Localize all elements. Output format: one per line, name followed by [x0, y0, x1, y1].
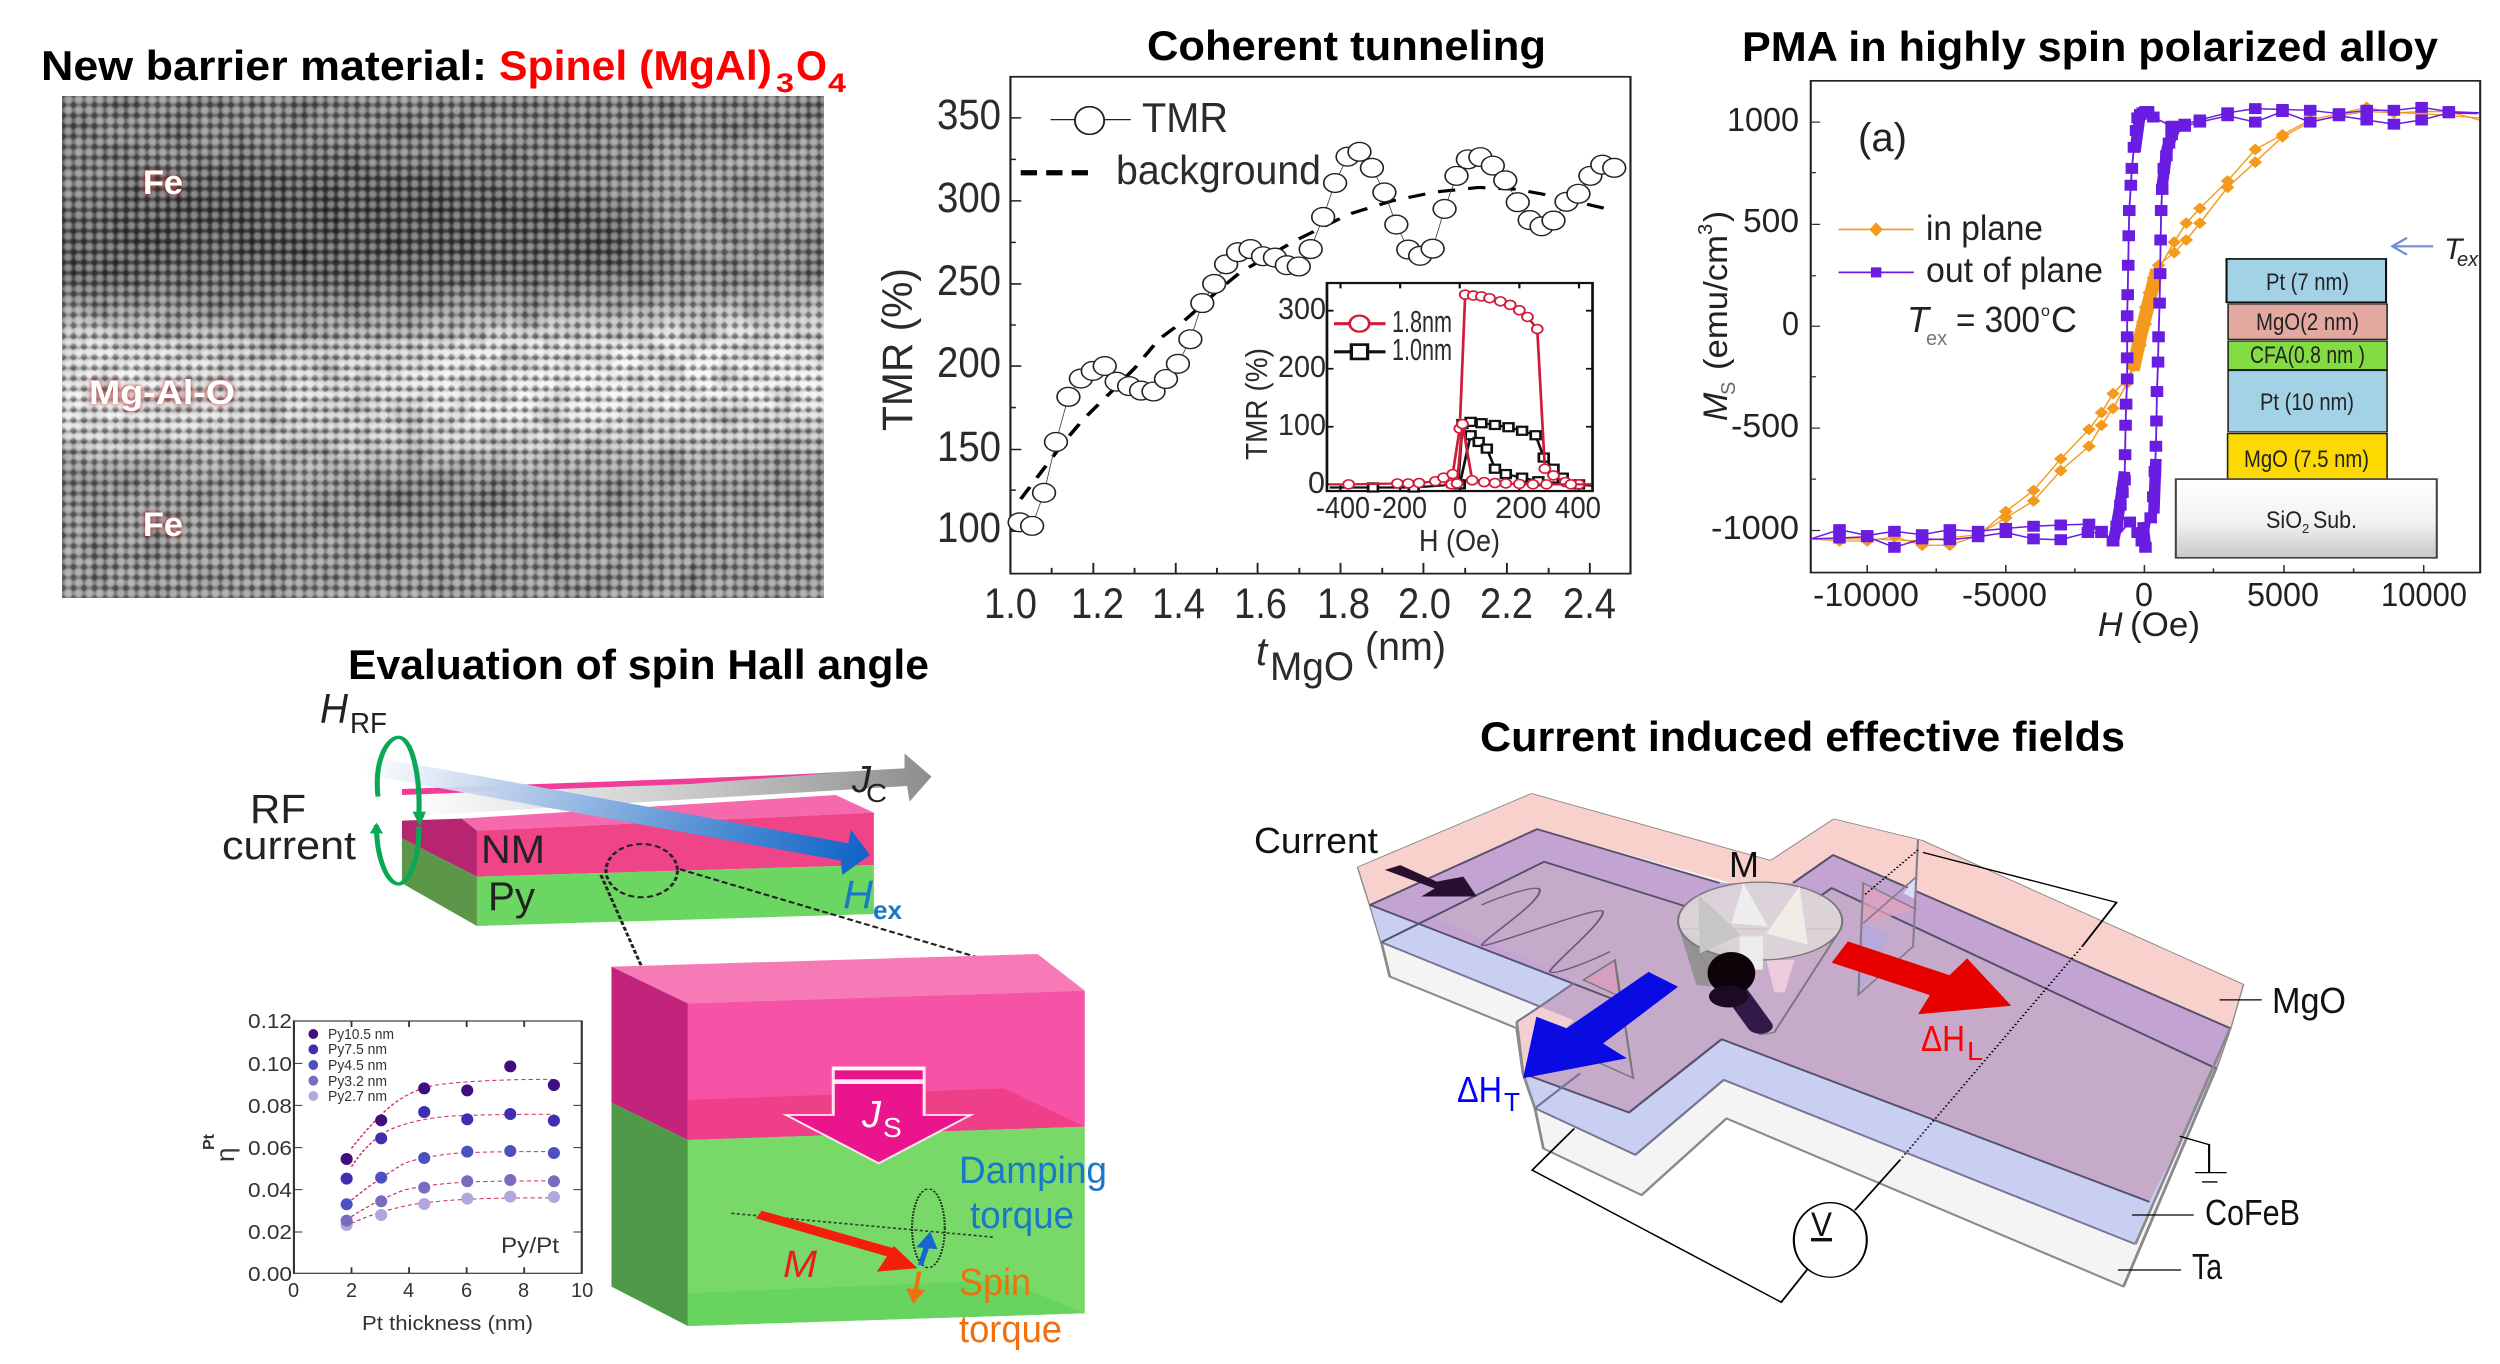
- label: Fe top: Fe: [143, 164, 183, 202]
- chart: TMR vs MgO thickness: 1.2: [1071, 580, 1124, 628]
- diagram: layered device with effective fields: V: [1811, 1206, 1832, 1244]
- diagram: spin Hall slab with RF current: current: [222, 824, 356, 868]
- chart: spin Hall angle vs Pt thickness: Pt: [201, 1133, 218, 1150]
- label: Mg-Al-O: Mg-Al-O: [89, 374, 235, 412]
- diagram: spin Hall slab with RF current: NM: [481, 828, 545, 872]
- diagram: enlarged NM/Py block with spin torques: torque: [959, 1309, 1062, 1351]
- chart: magnetization hysteresis: 10000: [2381, 576, 2467, 613]
- chart: TMR vs MgO thickness: 200: [937, 339, 1001, 387]
- 1.8nm curves: [1330, 295, 1591, 484]
- title: new barrier material: Spinel (MgAl): [499, 42, 772, 89]
- zoom circle: [606, 844, 677, 897]
- chart: TMR vs MgO thickness: TMR: [1142, 94, 1228, 141]
- title: new barrier material: O: [796, 42, 827, 89]
- MgO top layer: [1358, 794, 2243, 1028]
- chart: magnetization hysteresis: o: [2041, 303, 2050, 320]
- diagram: enlarged NM/Py block with spin torques: J: [861, 1094, 882, 1136]
- diagram: layered device with effective fields: Ta: [2192, 1246, 2223, 1287]
- chart: magnetization hysteresis: 1000: [1727, 101, 1799, 138]
- chart inset: TMR vs H: 300: [1278, 291, 1326, 326]
- film stack diagram: Pt (7 nm): [2266, 269, 2349, 296]
- TMR data series: [1020, 152, 1614, 526]
- translucent field planes: [1863, 883, 1917, 923]
- chart: spin Hall angle vs Pt thickness: 0.10: [248, 1054, 292, 1076]
- circuit wiring: [1532, 850, 2262, 1302]
- chart: spin Hall angle vs Pt thickness: 0.12: [248, 1011, 292, 1033]
- chart: magnetization hysteresis: H: [2098, 606, 2123, 644]
- chart: magnetization hysteresis: [1695, 81, 2480, 644]
- chart: spin Hall angle vs Pt thickness: 2: [346, 1280, 357, 1302]
- diagram: layered device with effective fields: ΔH: [1921, 1018, 1965, 1059]
- diagram: spin Hall slab with RF current: H: [843, 873, 873, 917]
- film stack diagram: MgO (7.5 nm): [2244, 446, 2369, 473]
- diagram: enlarged NM/Py block with spin torques: M: [783, 1244, 817, 1286]
- title: new barrier material: 4: [828, 68, 846, 98]
- chart inset: TMR vs H: 1.8nm: [1392, 304, 1452, 339]
- chart: magnetization hysteresis: 0: [1782, 305, 1799, 342]
- diagram: layered device with effective fields: Current: [1254, 820, 1378, 861]
- chart: magnetization hysteresis: in plane: [1926, 209, 2043, 248]
- chart: magnetization hysteresis: = 300: [1956, 299, 2040, 340]
- chart: magnetization hysteresis: C: [2051, 299, 2077, 340]
- chart: spin Hall angle vs Pt thickness: 0.06: [248, 1138, 292, 1160]
- inner lighter surface: [1434, 862, 2216, 1202]
- chart: TMR vs MgO thickness: t: [1256, 630, 1269, 674]
- chart: TMR vs MgO thickness: 350: [937, 91, 1001, 139]
- Jc arrow: [404, 753, 932, 817]
- film stack diagram: CFA(0.8 nm ): [2250, 342, 2365, 369]
- chart: spin Hall angle vs Pt thickness: 8: [518, 1280, 529, 1302]
- torque arrows: [921, 1243, 928, 1265]
- chart: TMR vs MgO thickness: 300: [937, 174, 1001, 222]
- chart: TMR vs MgO thickness: 2.2: [1480, 580, 1533, 628]
- HRF loop: [376, 737, 419, 884]
- chart inset: TMR vs H: 1.0nm: [1392, 332, 1452, 367]
- film stack diagram: [2176, 233, 2479, 558]
- chart: magnetization hysteresis: (emu/cm: [1697, 235, 1734, 370]
- chart: TMR vs MgO thickness: 1.0: [984, 580, 1037, 628]
- Hex arrow: [359, 754, 870, 875]
- slab faces: [462, 795, 874, 831]
- voltmeter: [1794, 1203, 1867, 1277]
- chart: spin Hall angle vs Pt thickness: η: [210, 1148, 240, 1162]
- fit curves: [351, 1079, 554, 1223]
- chart: spin Hall angle vs Pt thickness: Py10.5 nm: [328, 1026, 394, 1043]
- film stack diagram: ex: [2457, 249, 2479, 271]
- chart: TMR vs MgO thickness: 2.0: [1398, 580, 1451, 628]
- inset legend markers: [1334, 320, 1385, 327]
- chart: magnetization hysteresis: 5000: [2247, 576, 2319, 613]
- diagram: enlarged NM/Py block with spin torques: S: [883, 1112, 902, 1143]
- arm tip: [1517, 1007, 1574, 1074]
- longitudinal red arrow: [1832, 941, 2011, 1014]
- chart inset: TMR vs H: -200: [1373, 490, 1427, 525]
- diagram: layered device with effective fields: MgO: [2272, 980, 2346, 1021]
- chart: TMR vs MgO thickness: 1.6: [1234, 580, 1287, 628]
- diagram: spin Hall slab with RF current: Py: [488, 875, 535, 919]
- chart: TMR vs MgO thickness: MgO: [1270, 645, 1354, 689]
- diagram: enlarged NM/Py block with spin torques: [611, 954, 1107, 1351]
- title: PMA in highly spin polarized alloy: PMA in highly spin polarized alloy: [1742, 23, 2439, 70]
- diagram: spin Hall slab with RF current: ex: [873, 895, 903, 925]
- dashed background curve: [1021, 187, 1614, 499]
- chart: magnetization hysteresis: S: [1718, 382, 1740, 395]
- chart: magnetization hysteresis: -500: [1731, 407, 1799, 444]
- diagram: spin Hall slab with RF current: [222, 685, 981, 975]
- title: coherent tunneling: Coherent tunneling: [1147, 22, 1546, 69]
- Ta layer: [1358, 794, 2243, 1287]
- title: new barrier material: New barrier material:: [41, 42, 487, 89]
- film stack diagram: Pt (10 nm): [2260, 389, 2354, 416]
- in plane series: [1811, 107, 2479, 545]
- chart: TMR vs MgO thickness: 2.4: [1563, 580, 1616, 628]
- chart: TMR vs MgO thickness: background: [1116, 147, 1321, 193]
- chart: spin Hall angle vs Pt thickness: 0.00: [248, 1264, 292, 1286]
- diagram: spin Hall slab with RF current: C: [866, 778, 887, 808]
- film stack diagram: SiO: [2266, 507, 2302, 534]
- chart: magnetization hysteresis: -1000: [1711, 509, 1799, 546]
- panel: HRTEM lattice micrograph: [20, 96, 870, 640]
- chart: TMR vs MgO thickness: 1.8: [1317, 580, 1370, 628]
- diagram: spin Hall slab with RF current: H: [320, 685, 349, 732]
- diagram: enlarged NM/Py block with spin torques: Spin: [959, 1262, 1031, 1304]
- precession cone lines: [731, 1213, 995, 1237]
- chart: spin Hall angle vs Pt thickness: Pt thickness (nm): [362, 1313, 533, 1335]
- chart: magnetization hysteresis: ): [1697, 211, 1734, 222]
- chart: spin Hall angle vs Pt thickness: 6: [461, 1280, 472, 1302]
- current arrow: [1385, 865, 1477, 897]
- signal wave: [1482, 888, 1610, 972]
- chart: TMR vs MgO thickness: 1.4: [1152, 580, 1205, 628]
- chart: TMR vs MgO thickness: (nm): [1365, 625, 1446, 669]
- purple overlap surface: [1370, 829, 2230, 1202]
- out of plane series: [1811, 107, 2480, 541]
- Js arrow: [786, 1067, 971, 1163]
- diagram: layered device with effective fields: T: [1504, 1087, 1520, 1117]
- chart inset: TMR vs H: 200: [1278, 349, 1326, 384]
- film stack diagram: 2: [2302, 521, 2309, 536]
- chart: magnetization hysteresis: (a): [1858, 116, 1907, 160]
- chart inset: TMR vs H: [1239, 283, 1601, 558]
- chart: spin Hall angle vs Pt thickness: [201, 1011, 593, 1335]
- chart: spin Hall angle vs Pt thickness: 4: [403, 1280, 414, 1302]
- diagram: enlarged NM/Py block with spin torques: Damping: [959, 1150, 1107, 1192]
- film stack diagram: MgO(2 nm): [2256, 309, 2359, 336]
- diagram: spin Hall slab with RF current: RF: [250, 786, 306, 832]
- chart inset: TMR vs H: 100: [1278, 407, 1326, 442]
- chart inset: TMR vs H: TMR (%): [1239, 348, 1274, 460]
- chart: TMR vs MgO thickness: 100: [937, 504, 1001, 552]
- diagram: enlarged NM/Py block with spin torques: torque: [970, 1195, 1074, 1237]
- label: Fe bottom: Fe: [143, 506, 183, 544]
- chart: spin Hall angle vs Pt thickness: Py/Pt: [501, 1233, 559, 1258]
- chart: spin Hall angle vs Pt thickness: 10: [571, 1280, 593, 1302]
- magnetization arrow: [1736, 992, 1760, 1026]
- diagram: layered device with effective fields: L: [1967, 1036, 1983, 1066]
- chart: magnetization hysteresis: -5000: [1962, 576, 2047, 613]
- chart: spin Hall angle vs Pt thickness: Py3.2 nm: [328, 1073, 387, 1090]
- chart inset: TMR vs H: 0: [1453, 490, 1467, 525]
- chart: magnetization hysteresis: out of plane: [1926, 251, 2103, 290]
- chart: spin Hall angle vs Pt thickness: Py7.5 nm: [328, 1041, 387, 1058]
- chart: spin Hall angle vs Pt thickness: 0.08: [248, 1096, 292, 1118]
- diagram: layered device with effective fields: M: [1729, 844, 1759, 885]
- chart: magnetization hysteresis: (Oe): [2130, 606, 2200, 644]
- chart: spin Hall angle vs Pt thickness: 0.04: [248, 1180, 292, 1202]
- chart inset: TMR vs H: H (Oe): [1419, 523, 1500, 558]
- film stack diagram: Sub.: [2313, 507, 2357, 534]
- chart: magnetization hysteresis: -10000: [1813, 576, 1919, 613]
- diagram: layered device with effective fields: [1254, 794, 2346, 1302]
- transverse blue arrow: [1523, 972, 1678, 1078]
- chart: magnetization hysteresis: ex: [1926, 328, 1947, 350]
- chart: TMR vs MgO thickness: TMR (%): [874, 268, 922, 431]
- chart: magnetization hysteresis: M: [1697, 392, 1735, 421]
- chart: TMR vs MgO thickness: 250: [937, 257, 1001, 305]
- M arrow: [756, 1211, 895, 1257]
- title: new barrier material: 3: [776, 68, 794, 98]
- diagram: spin Hall slab with RF current: J: [851, 759, 872, 801]
- diagram: layered device with effective fields: CoFeB: [2205, 1192, 2300, 1233]
- title: new barrier material: [41, 42, 846, 98]
- chart inset: TMR vs H: -400: [1316, 490, 1370, 525]
- chart inset: TMR vs H: 200: [1495, 490, 1547, 525]
- chart inset: TMR vs H: 0: [1308, 465, 1325, 500]
- layer edges: [1370, 829, 2230, 1287]
- CoFeB layer: [1370, 829, 2230, 1244]
- chart: TMR vs MgO thickness: 150: [937, 423, 1001, 471]
- chart: spin Hall angle vs Pt thickness: Py2.7 nm: [328, 1088, 387, 1105]
- title: current induced effective fields: Current induced effective fields: [1480, 713, 2125, 760]
- chart: magnetization hysteresis: T: [1907, 299, 1932, 340]
- chart: spin Hall angle vs Pt thickness: 0: [288, 1280, 299, 1302]
- legend markers: [1051, 118, 1131, 121]
- chart: TMR vs MgO thickness: [874, 77, 1630, 689]
- title: evaluation of spin Hall angle: Evaluation of spin Hall angle: [348, 641, 929, 688]
- chart: spin Hall angle vs Pt thickness: 0.02: [248, 1222, 292, 1244]
- chart: magnetization hysteresis: 3: [1695, 224, 1717, 235]
- 1.0nm curves: [1330, 422, 1591, 487]
- chart: spin Hall angle vs Pt thickness: Py4.5 nm: [328, 1057, 387, 1074]
- film stack diagram: T: [2444, 233, 2465, 266]
- precession cone: [1679, 929, 1841, 1035]
- diagram: spin Hall slab with RF current: RF: [350, 708, 387, 740]
- data dots: [308, 1091, 560, 1231]
- chart: magnetization hysteresis: 500: [1743, 202, 1799, 239]
- chart inset: TMR vs H: 400: [1555, 490, 1601, 525]
- chart: magnetization hysteresis: 0: [2135, 576, 2153, 613]
- diagram: layered device with effective fields: ΔH: [1457, 1069, 1502, 1110]
